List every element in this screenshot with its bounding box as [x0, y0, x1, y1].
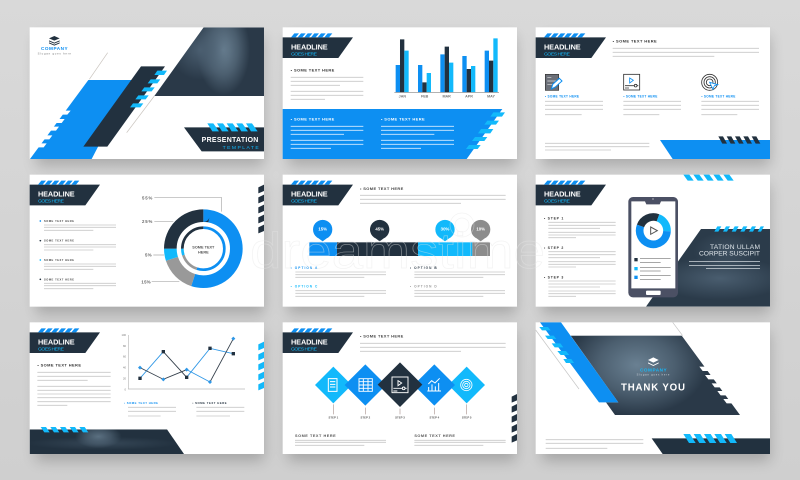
decorative diagonal rules [89, 53, 154, 133]
photo notches [699, 367, 734, 403]
donut callouts: 25% [142, 219, 152, 224]
heading [30, 181, 100, 205]
pin 30%: 30% [441, 227, 449, 232]
step 2: • STEP 2 [544, 246, 563, 250]
bar chart: MAR [443, 95, 451, 99]
diamond step 2 [345, 364, 386, 406]
option A [291, 266, 386, 277]
photo panel stripes [714, 226, 764, 232]
company logo [38, 36, 71, 55]
feature column 1: • SOME TEXT HERE [545, 95, 579, 99]
blue text band: • SOME TEXT HERE [381, 117, 425, 122]
footer text left [295, 434, 386, 445]
heading: GOES HERE [38, 199, 65, 205]
pin 10%: 10% [476, 227, 485, 232]
footer text left: SOME TEXT HERE [295, 434, 336, 438]
line chart: 60 [123, 355, 127, 359]
list: SOME TEXT HERE [44, 219, 74, 223]
line chart: 80 [123, 344, 127, 348]
pin 45%: 45% [375, 227, 384, 232]
step labels: STEP 2 [360, 416, 371, 420]
cover photo [154, 27, 264, 96]
company logo: COMPANY [640, 367, 668, 372]
donut callouts: 5% [145, 253, 152, 258]
step labels: STEP 4 [429, 416, 440, 420]
panel: phone mockup slide [536, 175, 787, 308]
bar chart: APR [465, 95, 473, 99]
option B: • OPTION B [410, 266, 437, 270]
option C: • OPTION C [291, 285, 318, 289]
line chart: 0 [125, 388, 127, 392]
company logo [637, 357, 670, 377]
donut centre label: SOME TEXT [192, 246, 215, 250]
intro text [360, 186, 506, 203]
footer photo band [30, 429, 184, 454]
bar chart: JAN [399, 95, 406, 99]
heading [30, 328, 100, 353]
option A: • OPTION A [291, 266, 318, 270]
heading: GOES HERE [291, 199, 318, 205]
heading: GOES HERE [544, 199, 571, 205]
heading: HEADLINE [38, 337, 75, 346]
donut centre label: HERE [198, 251, 209, 255]
panel: step process slide [283, 322, 517, 454]
dark photo panel [646, 229, 770, 307]
company logo: COMPANY [41, 46, 69, 51]
intro text [613, 39, 759, 56]
donut centre label [192, 246, 215, 255]
footer stripes [41, 427, 88, 432]
blue text band: • SOME TEXT HERE [291, 117, 335, 122]
blue text band [283, 109, 505, 159]
line chart: 20 [123, 376, 127, 380]
step labels: STEP 5 [462, 416, 472, 420]
bar chart [394, 38, 499, 99]
feature column 3 [701, 95, 759, 115]
cover title badge [184, 123, 264, 151]
feature column 3: • SOME TEXT HERE [701, 95, 735, 99]
bar chart: FEB [421, 95, 429, 99]
diamond step 4 [414, 364, 455, 406]
heading: HEADLINE [544, 190, 581, 199]
step labels: STEP 1 [328, 416, 339, 420]
intro text: • SOME TEXT HERE [613, 39, 657, 44]
feature column 1 [545, 95, 603, 115]
watermark: dreamstime [250, 223, 545, 279]
line chart: 40 [123, 366, 127, 370]
donut callouts [141, 196, 221, 284]
heading: HEADLINE [291, 42, 328, 51]
cover title badge: PRESENTATION [202, 137, 258, 144]
step labels: STEP 3 [395, 416, 405, 420]
pin 10% [471, 220, 490, 241]
line chart [122, 333, 245, 392]
diamond step 3 [378, 362, 422, 407]
footer text right: SOME TEXT HERE [414, 434, 455, 438]
list: SOME TEXT HERE [44, 277, 74, 281]
heading: GOES HERE [291, 346, 318, 352]
side stripes [512, 394, 517, 443]
panel: bar chart slide [283, 27, 517, 159]
list: SOME TEXT HERE [44, 258, 74, 262]
panel: donut chart slide [30, 175, 264, 307]
pin 45% [370, 220, 389, 241]
panel: progress bar slide [283, 175, 517, 307]
panel: line chart slide [27, 322, 264, 455]
text block: • SOME TEXT HERE [291, 68, 335, 73]
donut callouts: 55% [142, 196, 152, 201]
line chart: 100 [122, 333, 127, 337]
pin 30% [435, 220, 455, 241]
icon: play [651, 227, 657, 234]
feature column 2 [623, 95, 681, 115]
photo panel text [689, 244, 760, 269]
phone donut [636, 213, 671, 248]
diamond step 5 [448, 367, 485, 403]
heading: HEADLINE [544, 42, 581, 51]
option D: • OPTION D [410, 285, 437, 289]
cover title badge: TEMPLATE [223, 145, 259, 151]
option D [410, 285, 505, 296]
panel: cover slide [30, 27, 264, 159]
blue band [539, 322, 618, 402]
panel: thank you slide [536, 315, 770, 454]
intro text: • SOME TEXT HERE [360, 186, 404, 191]
pin 15%: 15% [318, 227, 327, 232]
legend: blue series: • SOME TEXT HERE [124, 401, 158, 405]
heading [536, 181, 606, 205]
donut chart [170, 216, 236, 282]
option B [410, 266, 505, 277]
bar chart: MAY [487, 95, 495, 99]
legend: blue series [124, 401, 176, 416]
footer band [652, 434, 770, 454]
step 1 [544, 217, 616, 238]
stacked bar [309, 242, 490, 256]
heading [536, 33, 606, 58]
footer band [660, 136, 770, 159]
icon: target [702, 74, 718, 90]
heading: HEADLINE [291, 190, 328, 199]
company logo: Slogan goes here [637, 373, 670, 377]
step 3: • STEP 3 [544, 275, 563, 279]
phone mockup [628, 197, 678, 297]
heading: GOES HERE [291, 51, 318, 57]
intro text: • SOME TEXT HERE [360, 334, 404, 339]
footer text [545, 143, 649, 150]
blue band [30, 80, 133, 159]
heading: GOES HERE [544, 51, 571, 57]
pin 15% [313, 220, 332, 241]
top stripes [683, 175, 734, 181]
heading [283, 181, 353, 205]
list [39, 219, 116, 289]
heading: HEADLINE [291, 337, 328, 346]
legend: dark series: • SOME TEXT HERE [192, 401, 227, 405]
footer text right [414, 434, 506, 445]
heading [283, 328, 353, 353]
side stripes [258, 342, 264, 390]
photo panel text: CORPER SUSCIPIT [699, 251, 760, 258]
text block: • SOME TEXT HERE [37, 363, 81, 368]
phone legend [634, 258, 671, 279]
step 2 [544, 246, 616, 267]
dark band [83, 66, 167, 147]
step 1: • STEP 1 [544, 217, 563, 221]
step 3 [544, 275, 616, 296]
legend: dark series [192, 401, 244, 416]
footer text [546, 440, 643, 448]
list: SOME TEXT HERE [44, 239, 74, 243]
panel: three icons slide [536, 27, 770, 159]
thank you heading: THANK YOU [621, 383, 685, 394]
heading: GOES HERE [38, 346, 65, 352]
text block [37, 363, 111, 405]
photo panel text: TATION ULLAM [710, 244, 760, 251]
icon: document and pencil [545, 74, 562, 90]
donut callouts: 15% [141, 279, 151, 284]
step labels [328, 404, 472, 420]
diagonal rules [536, 322, 683, 389]
text block [291, 68, 363, 99]
heading: HEADLINE [38, 190, 75, 199]
company logo: Slogan goes here [38, 51, 71, 55]
side stripes [258, 185, 264, 233]
feature column 2: • SOME TEXT HERE [623, 95, 657, 99]
intro text [360, 334, 506, 351]
heading [283, 33, 353, 58]
icon: video player [624, 74, 640, 90]
option C [291, 285, 386, 296]
diamond step 1 [315, 367, 352, 403]
thank you photo [570, 336, 740, 415]
